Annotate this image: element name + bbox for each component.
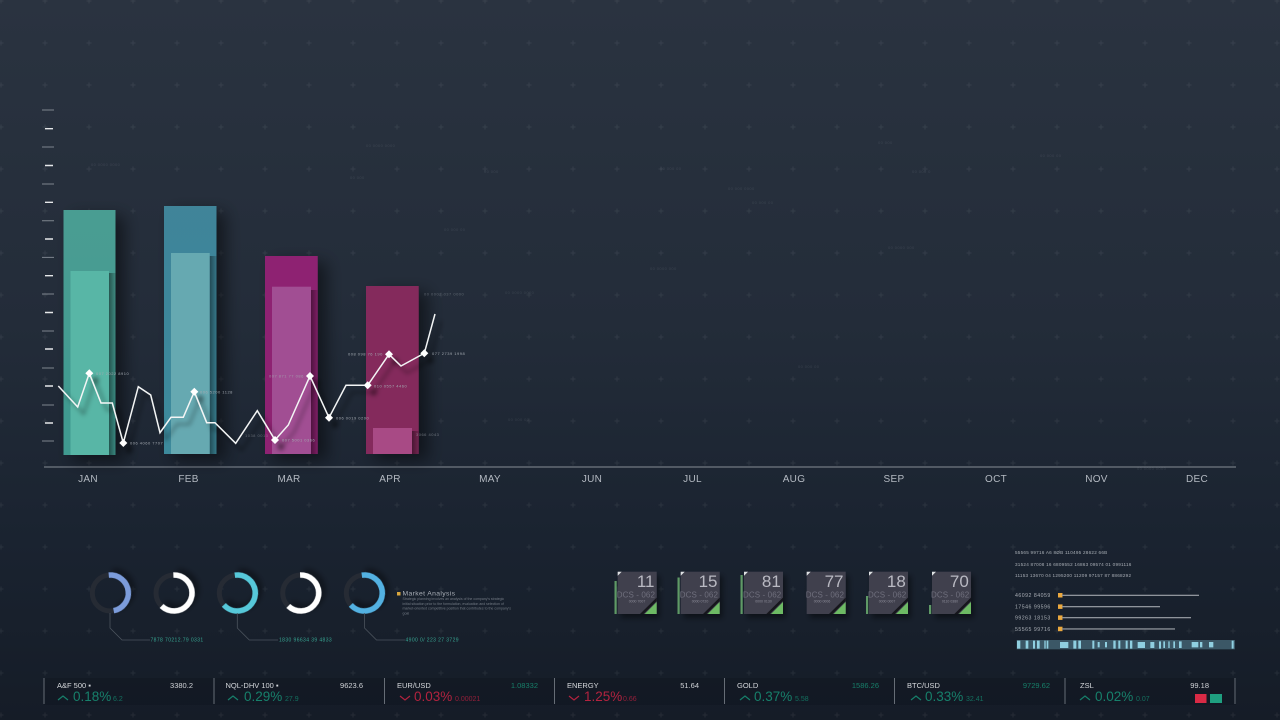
- stat card 18: DCS - 062: [868, 590, 907, 600]
- market analysis text block: market-oriented competitive position that contributes to the company's: [402, 607, 511, 611]
- scattered faint data labels: 00 0000 000: [888, 245, 915, 250]
- stat card 81: 81: [762, 572, 781, 591]
- donut chart 3: 1830 96634 39 4833: [279, 638, 332, 644]
- month labels: JUL: [683, 474, 702, 485]
- code readout block: 31524 87008 16 6809552 16863 09574 01 0991116: [1015, 562, 1132, 567]
- stat card 77: DCS - 062: [806, 590, 844, 600]
- horizontal progress rows: [1015, 593, 1199, 633]
- ticker: ENERGY: ENERGY: [567, 681, 599, 690]
- code readout block: [1015, 550, 1132, 578]
- stat card 81: [740, 572, 783, 614]
- chart point labels: 006 4060 7707: [130, 440, 163, 446]
- chart point labels: 007 5001 0366: [282, 438, 315, 442]
- ticker: A&F 500: 3380.2: [170, 681, 193, 690]
- ticker: NQL-DHV 100: [226, 681, 363, 704]
- ticker: BTC/USD: 9729.62: [1023, 681, 1050, 690]
- chart point labels: [96, 292, 465, 446]
- month labels: NOV: [1085, 474, 1108, 485]
- ticker: BTC/USD: [907, 681, 1050, 704]
- market analysis text block: Market Analysis: [402, 590, 456, 598]
- donut chart 4: [282, 574, 319, 612]
- month labels: SEP: [884, 474, 904, 485]
- month labels: MAR: [277, 474, 301, 485]
- y axis ticks: [42, 110, 54, 441]
- ticker: NQL-DHV 100: 9623.6: [340, 681, 363, 690]
- scattered faint data labels: [91, 140, 1167, 471]
- code readout block: 11153 13670 04 1295200 11209 97157 87 8868292: [1015, 573, 1131, 578]
- code readout block: 55565 99716 A6 8ØB 110495 28622 66B: [1015, 550, 1107, 555]
- bar: March: [265, 256, 318, 454]
- ticker: EUR/USD: [397, 681, 538, 704]
- ticker: ZSL: 0.07: [1136, 696, 1150, 703]
- chart point labels: 007 871 77 086: [269, 374, 304, 378]
- ticker: GOLD: [737, 681, 879, 704]
- ticker: EUR/USD: EUR/USD: [397, 681, 431, 690]
- ticker: BTC/USD: BTC/USD: [907, 681, 941, 690]
- ticker: ZSL: 99.18: [1190, 681, 1209, 690]
- ticker: NQL-DHV 100: NQL-DHV 100 ▪: [226, 681, 279, 690]
- month labels: MAY: [479, 474, 501, 485]
- barcode strip: [1017, 640, 1235, 649]
- ticker: ENERGY: 1.25%: [584, 689, 622, 704]
- month labels: JAN: [78, 474, 98, 485]
- scattered faint data labels: 00 000 0000: [728, 186, 755, 191]
- ticker: ZSL: 0.02%: [1095, 689, 1133, 704]
- chart point labels: 007 2022 8910: [96, 371, 129, 376]
- market analysis text block: [397, 590, 511, 615]
- ticker: A&F 500: 0.18%: [73, 689, 111, 704]
- scattered faint data labels: 00 000: [350, 175, 365, 180]
- donut chart 1: [91, 573, 204, 644]
- ticker: ENERGY: 0.66: [623, 696, 637, 703]
- scattered faint data labels: 00 000: [878, 140, 893, 145]
- bar: April: [366, 286, 419, 454]
- scattered faint data labels: 00 000: [484, 169, 499, 174]
- scattered faint data labels: 00 0000 000: [650, 266, 677, 271]
- stat card 70: 70: [950, 572, 969, 591]
- ticker: A&F 500: A&F 500 ▪: [57, 681, 91, 690]
- chart point labels: 00 0002 037 0000: [424, 292, 465, 296]
- ticker: EUR/USD: 1.08332: [511, 681, 538, 690]
- scattered faint data labels: 00 0000 0000: [91, 162, 121, 167]
- ticker: A&F 500: 6.2: [113, 696, 123, 703]
- scattered faint data labels: 00 0000 0000: [1137, 466, 1167, 471]
- market analysis text block: initial situation prior to the formulation, evaluation and selection of: [402, 602, 504, 606]
- chart point labels: 077 2739 1998: [432, 351, 465, 356]
- ticker: NQL-DHV 100: 0.29%: [244, 689, 282, 704]
- line chart: [58, 314, 435, 447]
- donut chart 1: 7878 70212.79 0331: [150, 638, 204, 644]
- stat card 11: [614, 572, 657, 614]
- horizontal progress rows: 55565 99716: [1015, 627, 1051, 633]
- month labels: OCT: [985, 474, 1007, 485]
- scattered faint data labels: 00 000 00: [752, 200, 774, 205]
- month labels: DEC: [1186, 474, 1208, 485]
- ticker: ZSL: [1080, 681, 1222, 704]
- stat card 77: [806, 572, 846, 614]
- scattered faint data labels: 00 0000 0000: [366, 143, 396, 148]
- donut chart 3: [217, 573, 332, 644]
- ticker: GOLD: 1586.26: [852, 681, 879, 690]
- market analysis text block: Strategic planning involves an analysis of the company's strategic: [402, 597, 504, 601]
- ticker band: [44, 678, 1236, 705]
- month labels: APR: [379, 474, 401, 485]
- scattered faint data labels: 00 000 00: [1040, 153, 1062, 158]
- stat card 70: 0110 0380: [942, 600, 958, 604]
- ticker: GOLD: 0.37%: [754, 689, 792, 704]
- chart point labels: 010 0557 4460: [374, 384, 407, 388]
- x axis line: [44, 466, 1236, 468]
- market analysis text block: goal: [402, 611, 409, 615]
- ticker: ENERGY: [567, 681, 699, 704]
- stat card 77: 77: [825, 572, 844, 591]
- donut chart 2: [155, 574, 193, 612]
- scattered faint data labels: 00 000 00: [660, 166, 682, 171]
- ticker: A&F 500: [57, 681, 193, 704]
- stat card 18: 18: [887, 572, 906, 591]
- month labels: JUN: [582, 474, 602, 485]
- scattered faint data labels: 00 000 00: [508, 417, 530, 422]
- bar: January: [64, 210, 116, 455]
- chart point labels: 1038 0013: [245, 433, 269, 438]
- stat card 18: [866, 572, 908, 614]
- bar: February: [164, 206, 216, 454]
- stat card 18: 0000 0007: [879, 600, 895, 604]
- stat card 15: 15: [699, 572, 718, 591]
- stat card 15: [678, 572, 720, 614]
- stat card 70: [929, 572, 971, 614]
- ticker: EUR/USD: 0.03%: [414, 689, 452, 704]
- scattered faint data labels: 00 000 00: [798, 364, 820, 369]
- stat card 11: 0000 7007: [629, 600, 645, 604]
- ticker: ZSL: ZSL: [1080, 681, 1094, 690]
- horizontal progress rows: 46092 84059: [1015, 593, 1051, 599]
- ticker: BTC/USD: 32.41: [966, 696, 984, 703]
- ticker: ENERGY: 51.64: [680, 681, 699, 690]
- donut chart 5: 4900 0/ 223 27 3729: [406, 638, 459, 644]
- stat card 11: DCS - 062: [617, 590, 655, 600]
- stat card 15: DCS - 062: [680, 590, 718, 600]
- stat card 70: DCS - 062: [931, 590, 970, 600]
- scattered faint data labels: 00 000 0: [912, 169, 931, 174]
- ticker: EUR/USD: 0.00021: [455, 696, 480, 703]
- ticker: BTC/USD: 0.33%: [925, 689, 963, 704]
- stat card 81: DCS - 062: [743, 590, 782, 600]
- month labels: AUG: [783, 474, 805, 485]
- horizontal progress rows: 99263 18153: [1015, 616, 1051, 622]
- ticker: GOLD: GOLD: [737, 681, 759, 690]
- chart point labels: 006 5200 1128: [200, 390, 233, 394]
- scattered faint data labels: 00 0000 0000: [505, 290, 535, 295]
- month labels: [78, 474, 1208, 485]
- stat card 15: 0000 0720: [692, 600, 708, 604]
- ticker: NQL-DHV 100: 27.9: [285, 696, 299, 703]
- donut chart 5: [344, 573, 459, 644]
- chart point labels: 006 0019 0200: [336, 416, 369, 420]
- stat card 77: 0000 0006: [814, 600, 830, 604]
- month labels: FEB: [178, 474, 199, 485]
- horizontal progress rows: 17546 99596: [1015, 604, 1051, 610]
- chart point labels: 008 098 76 190: [348, 352, 383, 356]
- ticker: GOLD: 5.58: [795, 696, 809, 703]
- chart point labels: 3066 4043: [416, 432, 440, 437]
- scattered faint data labels: 00 000 00: [444, 227, 466, 232]
- stat card 81: 0000 0130: [755, 600, 772, 604]
- stat card 11: 11: [637, 572, 654, 591]
